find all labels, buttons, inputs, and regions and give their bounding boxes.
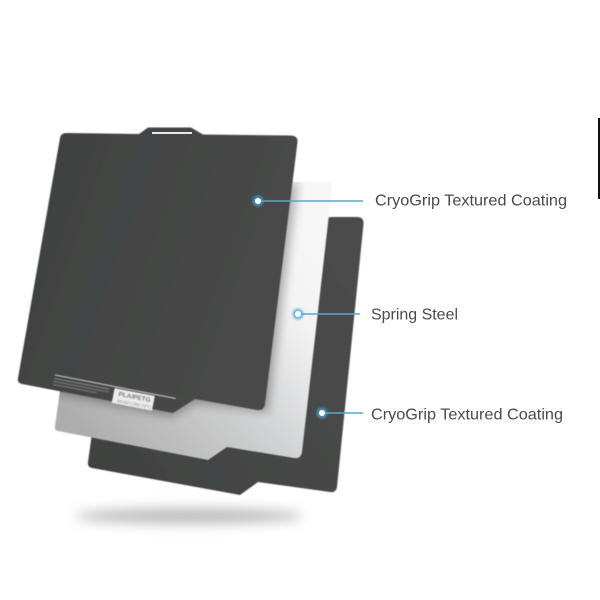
shadow cast by top plate (50, 180, 298, 417)
fine print and temperature label (52, 375, 176, 415)
edge bar (598, 118, 600, 199)
infographic: layered build plate diagram (17, 118, 600, 530)
plate: top textured coating (18, 128, 298, 415)
label: PLA/PETG: PLA/PETG (118, 391, 151, 404)
tab slot (152, 132, 192, 134)
callout: spring steel: Spring Steel (371, 306, 458, 324)
plate: spring steel (50, 180, 332, 460)
callout: spring steel (292, 306, 458, 324)
plate: back textured coating (88, 217, 364, 495)
callout: top coating (252, 192, 567, 210)
label: PLA/PETG: 50-60°C/60-70°C (117, 398, 152, 410)
callout: top coating: CryoGrip Textured Coating (375, 192, 567, 210)
label: PLA/PETG (112, 388, 155, 411)
callout: back coating: CryoGrip Textured Coating (371, 406, 563, 424)
floor shadow (75, 508, 303, 524)
